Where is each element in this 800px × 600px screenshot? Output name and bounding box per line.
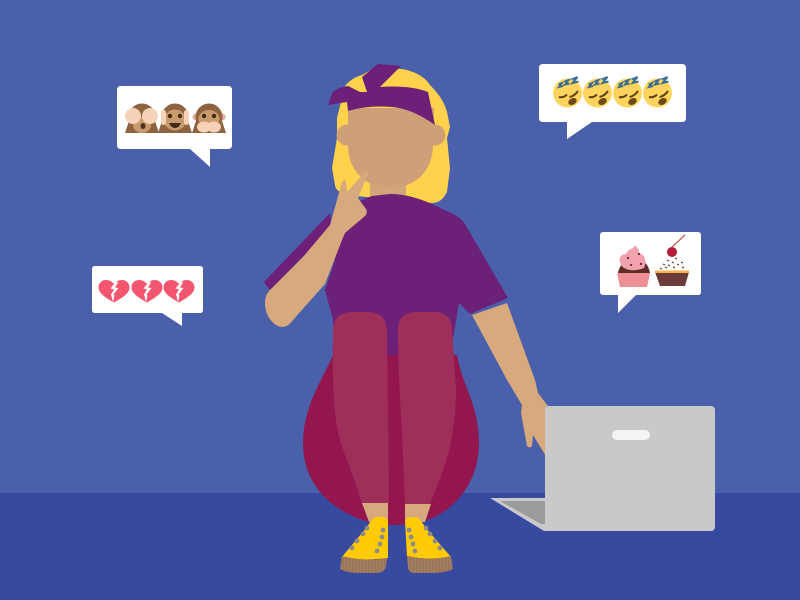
- right leg: [398, 312, 456, 504]
- icon: broken heart 3: [164, 280, 194, 302]
- laptop lid: [545, 406, 715, 531]
- ankles: [362, 503, 431, 522]
- icon: chocolate cupcake with cherry: [655, 235, 689, 286]
- speech bubble: broken hearts: [92, 266, 203, 326]
- floor: [0, 493, 800, 600]
- t-shirt: [264, 194, 508, 356]
- left shoe: [340, 517, 388, 573]
- laptop base: [490, 498, 550, 531]
- headband: [328, 64, 435, 125]
- icon: sleeping face 1: [553, 77, 582, 108]
- laptop logo: [612, 430, 650, 440]
- face and ears: [336, 108, 446, 188]
- icon: hear-no-evil monkey: [158, 104, 192, 133]
- speech bubble: monkeys: [117, 86, 232, 167]
- pants body: [303, 355, 479, 525]
- right arm: [472, 303, 548, 458]
- icon: pink cupcake: [617, 245, 650, 287]
- icon: broken heart 2: [132, 280, 162, 302]
- icon: sleeping face 2: [583, 77, 612, 108]
- right shoe: [405, 517, 453, 573]
- character: [264, 64, 548, 573]
- speech bubble: cupcakes: [600, 232, 701, 313]
- icon: sleeping face 3: [613, 77, 642, 108]
- icon: see-no-evil monkey: [125, 104, 159, 133]
- neck: [370, 175, 406, 203]
- laptop keyboard: [500, 501, 546, 524]
- icon: speak-no-evil monkey: [192, 104, 226, 133]
- raised arm and hand: [265, 171, 369, 327]
- speech bubble: sleeping faces: [539, 64, 686, 139]
- hair: [332, 66, 450, 203]
- icon: sleeping face 4: [643, 77, 672, 108]
- left leg: [333, 312, 389, 503]
- icon: broken heart 1: [98, 280, 130, 302]
- laptop: [490, 406, 715, 531]
